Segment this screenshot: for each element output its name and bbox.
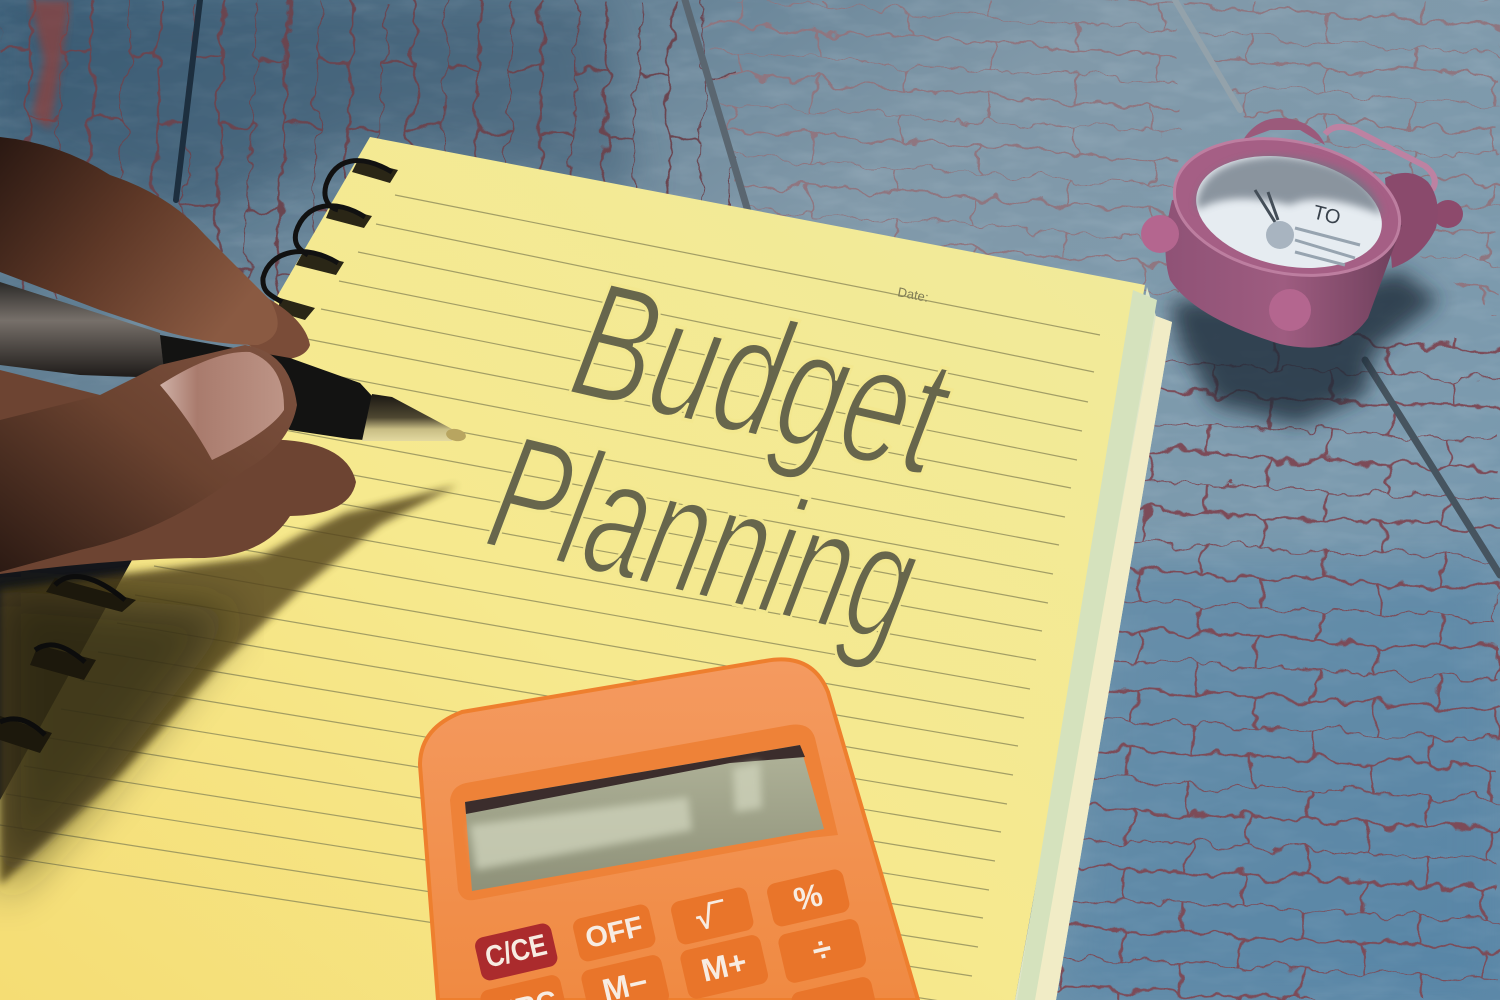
index finger bbox=[0, 137, 278, 345]
middle finger tip bbox=[240, 295, 310, 360]
thumbnail bbox=[160, 352, 284, 460]
word: Planning: Planning bbox=[474, 399, 933, 679]
key M minus bbox=[580, 953, 671, 1000]
hand holding a pen bbox=[0, 137, 467, 574]
top spiral holes bbox=[278, 160, 398, 320]
screen dark band bbox=[465, 745, 805, 814]
pen cone bbox=[362, 394, 452, 441]
calculator body bbox=[420, 659, 918, 1000]
clock body bbox=[1165, 200, 1402, 348]
right bell bbox=[1385, 173, 1438, 268]
calculator bbox=[420, 659, 918, 1000]
hands and shadow stripes bbox=[1255, 190, 1278, 222]
spiral binding bbox=[0, 160, 398, 753]
screen reflections bbox=[470, 762, 762, 870]
clock shadow on table bbox=[1170, 270, 1440, 425]
lcd screen bbox=[465, 745, 824, 891]
page block edge bbox=[1015, 287, 1172, 1000]
screen recess bbox=[450, 725, 838, 900]
dark gap below hand, left of notebook bbox=[0, 560, 140, 800]
clock face bbox=[1186, 141, 1392, 283]
handwritten title bbox=[474, 244, 967, 679]
key M plus: M+ bbox=[698, 943, 750, 989]
key square root: √‾ bbox=[692, 895, 730, 937]
pen grip bbox=[160, 335, 372, 440]
key percent bbox=[765, 868, 851, 928]
top bell bbox=[1243, 118, 1325, 145]
hand shadow on paper bbox=[0, 485, 458, 885]
ruled lines bbox=[0, 195, 1100, 1000]
notebook bbox=[0, 137, 1172, 1000]
front knob bbox=[1269, 289, 1311, 331]
key divide: ÷ bbox=[809, 929, 835, 971]
lower right blue tint bbox=[1060, 560, 1500, 1000]
key multiply bbox=[790, 975, 881, 1000]
date label: Date: bbox=[896, 284, 930, 305]
yellow top sheet bbox=[0, 137, 1145, 1000]
alarm clock bbox=[1141, 118, 1463, 348]
dark top-left corner tint bbox=[0, 0, 640, 220]
pale green edge band bbox=[1017, 290, 1157, 1000]
clock rim bbox=[1163, 120, 1411, 294]
key percent: % bbox=[790, 876, 826, 918]
left knob bbox=[1141, 215, 1179, 253]
key MRC bbox=[479, 973, 570, 1000]
back fingers under the pen bbox=[0, 370, 356, 574]
key divide bbox=[777, 917, 868, 985]
lower spiral holes bbox=[0, 578, 136, 753]
thumb bbox=[0, 345, 297, 572]
red paint on top-left plank bbox=[30, 0, 70, 130]
right knob bbox=[1433, 200, 1463, 228]
key OFF bbox=[571, 903, 657, 963]
weathered cracks: upper middle plank bbox=[700, 0, 1500, 320]
pen point bbox=[445, 427, 467, 443]
key M plus bbox=[679, 933, 770, 1000]
word: Budget: Budget bbox=[558, 244, 967, 512]
white page edges bbox=[1032, 316, 1172, 1000]
keypad bbox=[473, 868, 881, 1000]
weathered cracks: left planks bbox=[0, 0, 730, 300]
clock handle bbox=[1325, 127, 1435, 190]
key C/CE: C/CE bbox=[482, 928, 550, 975]
pen barrel bbox=[0, 282, 165, 378]
plank gaps bbox=[176, 0, 1500, 575]
lower-left soft shade bbox=[0, 590, 240, 900]
clock numeral: TO bbox=[1311, 202, 1343, 229]
key square root bbox=[669, 886, 755, 946]
weathered cracks: lower right blocks bbox=[1050, 340, 1500, 1000]
key OFF: OFF bbox=[582, 911, 646, 955]
